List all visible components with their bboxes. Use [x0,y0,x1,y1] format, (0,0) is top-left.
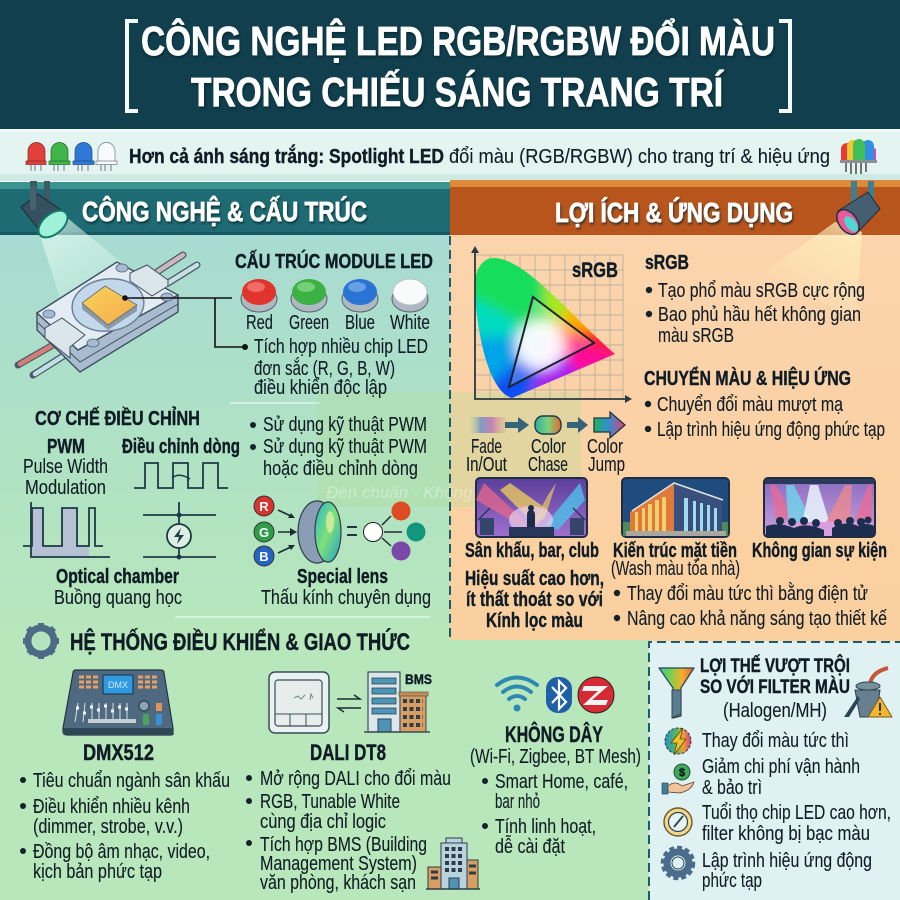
panel heading: LỢI THẾ VƯỢT TRỘI [700,655,850,677]
labels: Chase [528,454,568,476]
title brackets [127,21,790,111]
terminal tabs [130,265,168,296]
lower control panel background [0,640,650,900]
labels: Color [531,436,566,458]
wireless column [470,677,641,858]
subtitle bold text: Hơn cả ánh sáng trắng: Spotlight LED [129,144,444,168]
bullets: PWM [250,414,427,480]
heading: LỢI ÍCH & ỨNG DỤNG [555,197,793,228]
efficiency callout: Kính lọc màu [486,610,583,632]
bullets: màu sRGB [658,325,734,347]
icon: wifi [497,678,537,712]
efficiency callout: Hiệu suất cao hơn, [465,568,604,590]
caption: optical chamber: Buồng quang học [54,587,182,609]
PWM label: PWM [47,436,85,458]
chart: current waveform [134,463,228,488]
icon: optical chamber circuit [143,502,216,560]
chip description [254,336,428,399]
watermark box [317,392,581,507]
application labels [465,540,887,580]
wireless bullets: bar nhỏ [495,791,540,813]
effect transitions row [466,412,625,476]
DMX512 column [20,670,230,883]
DALI bullets: RGB, Tunable White [260,791,400,813]
fade swatch [470,417,506,433]
icon: DMX console: DMX [108,680,128,690]
heading: sRGB [645,252,689,274]
labels: Color [587,436,623,458]
icon: bidirectional arrows [337,695,361,712]
colour transition text block [644,366,885,441]
icon: office building [426,838,480,889]
chart label: sRGB [572,259,618,282]
DALI title: DALI DT8 [310,740,386,765]
chart: sRGB colour gamut [471,246,632,403]
adjustment mechanism block [23,407,431,609]
DMX bullets: Điều khiển nhiều kênh [33,796,190,818]
chart: PWM waveform [23,502,110,557]
spotlight beam right [765,222,862,320]
efficiency callout [465,568,604,632]
panel: advantages over colour filter [649,641,900,900]
panel heading: (Halogen/MH) [723,700,827,722]
chip labels: Red [246,312,273,334]
DALI bullets: Management System) [260,853,417,875]
subtitle strip [0,129,900,181]
right bullets [614,582,887,630]
DMX bullets: Đồng bộ âm nhạc, video, [33,841,210,863]
icon: green LED [49,142,70,171]
labels [466,436,625,476]
section divider [449,236,451,641]
DMX bullets: kịch bản phức tạp [33,861,162,883]
section header: lợi ích và ứng dụng [450,180,900,320]
white chip [392,279,428,312]
icon: BMS buildings: BMS [405,671,432,687]
labels: Jump [588,454,625,476]
icon: white LED [96,142,117,171]
DALI bullets: Tích hợp BMS (Building [260,834,427,856]
chip labels [246,312,430,334]
title line 1: CÔNG NGHỆ LED RGB/RGBW ĐỔI MÀU [141,17,775,64]
icon: BMS buildings [364,671,432,732]
icon: RGB into lens: B [259,549,269,564]
wireless title: KHÔNG DÂY [505,722,603,747]
mounting holes [43,264,173,347]
main title [127,17,790,115]
chase swatch [535,416,561,434]
icon: left spotlight [21,181,72,243]
bullets: PWM: Sử dụng kỹ thuật PWM [263,436,427,458]
illustration: building facade [622,478,729,537]
DALI bullets: văn phòng, khách sạn [260,872,416,894]
blue chip [342,279,378,312]
icon: DALI wall panel [269,672,329,733]
item: instant colour change: Thay đổi màu tức thì [702,730,849,752]
PWM description: Pulse Width [23,456,108,478]
bullets: PWM: Sử dụng kỹ thuật PWM [263,414,427,436]
bullets: PWM: hoặc điều chỉnh dòng [263,458,418,480]
DALI bullets [246,768,451,894]
sRGB text block [645,252,865,347]
heading: CHUYỂN MÀU & HIỆU ỨNG [644,366,851,390]
icon: zigbee [578,677,614,713]
DALI DT8 column [246,671,480,894]
application labels: Sân khấu, bar, club [465,540,599,562]
right panel background [450,235,900,641]
item: longer life: filter không bị bạc màu [702,823,870,845]
panel heading [700,655,850,722]
DMX bullets [20,770,230,883]
spotlight beam left [40,216,155,330]
arrow [567,417,588,433]
heading: HỆ THỐNG ĐIỀU KHIỂN & GIAO THỨC [70,628,410,656]
DALI bullets: Mở rộng DALI cho đổi màu [260,768,451,790]
chip labels: White [390,312,430,334]
DALI bullets: cùng địa chỉ logic [260,811,386,833]
module structure block [235,249,433,399]
heading: CÔNG NGHỆ & CẤU TRÚC [82,195,367,227]
item: programmable effects [662,848,872,892]
header background [0,0,900,129]
application labels: (Wash màu tỏa nhà) [611,558,740,580]
item: programmable effects: phức tạp [702,870,762,892]
wireless bullets: Smart Home, café, [495,771,628,793]
title line 2: TRONG CHIẾU SÁNG TRANG TRÍ [191,69,724,115]
icon: RGB into lens: G [259,525,269,540]
gamut horseshoe [476,258,615,398]
icon: funnel [659,668,694,718]
icon: multicolour LED cluster [840,139,877,174]
efficiency callout: ít thất thoát so với [466,589,603,611]
bullets [646,280,865,347]
item: lower operating cost: & bảo trì [702,777,762,799]
item: instant colour change [665,728,849,755]
panel heading: SO VỚI FILTER MÀU [700,676,850,698]
grid [475,255,623,399]
icon: DMX console [63,670,173,735]
module body [37,295,178,372]
item: lower operating cost: Giảm chi phí vận hành [702,756,860,778]
bullets: Chuyển đổi màu mượt mạ [657,394,844,416]
axes [475,250,627,399]
chip description: Tích hợp nhiều chip LED [254,336,428,358]
icon: trash and warning [844,668,892,717]
jump arrow [594,412,625,438]
chip labels: Blue [345,312,375,334]
chip description: đơn sắc (R, G, B, W) [254,357,395,380]
wireless bullets [482,771,628,858]
icon: RGB into lens [254,496,426,566]
chip labels: Green [289,312,329,334]
control system heading [23,623,410,659]
DMX bullets: Tiêu chuẩn ngành sân khấu [33,770,230,792]
green chip [291,279,327,312]
wireless bullets: Tính linh hoạt, [495,816,596,838]
current adjust label: Điều chỉnh dòng [122,436,240,458]
item: lower operating cost [662,756,860,799]
chip description: điều khiển độc lập [254,377,387,399]
leader lines [125,298,245,347]
icon: red LED [26,143,46,171]
caption: optical chamber: Optical chamber [56,566,179,588]
DMX bullets: (dimmer, strobe, v.v.) [33,816,183,838]
left panel background [0,235,450,641]
illustration: stage scene [476,478,587,537]
subtitle regular text: đổi màu (RGB/RGBW) cho trang trí & hiệu ứng [449,146,830,168]
caption: special lens: Special lens [297,566,388,588]
item: longer life [664,802,891,845]
icon: RGB into lens: R [259,499,269,514]
icon: blue LED [73,142,94,171]
icon: bluetooth [546,677,572,713]
bullets [645,394,885,441]
icon: gear [23,623,59,659]
heading: CƠ CHẾ ĐIỀU CHỈNH [35,407,200,430]
heading: CẤU TRÚC MODULE LED [235,249,433,273]
PWM description: Modulation [25,477,106,499]
labels: In/Out [466,454,507,476]
illustration: LED module [18,255,248,375]
application labels: Kiến trúc mặt tiền [613,540,737,562]
item: lower operating cost: $ [679,767,685,779]
wires [157,255,183,272]
section header: công nghệ và cấu trúc [0,181,450,330]
DMX title: DMX512 [83,740,154,765]
red chip [241,279,277,312]
PWM description [23,456,108,499]
optical ring [69,274,147,336]
illustration: event space [764,478,875,537]
watermark box: Đèn chuẩn - Không [326,483,473,502]
icon: right spotlight [832,181,880,239]
arrow [505,417,529,433]
caption: special lens: Thấu kính chuyên dụng [261,587,431,609]
LED chip [82,303,137,330]
wireless bullets: dễ cài đặt [495,835,565,858]
caption: special lens [261,566,431,609]
sRGB triangle [509,297,594,387]
wireless protocols: (Wi-Fi, Zigbee, BT Mesh) [470,746,641,768]
labels: Fade [471,436,502,458]
caption: optical chamber [54,566,182,609]
